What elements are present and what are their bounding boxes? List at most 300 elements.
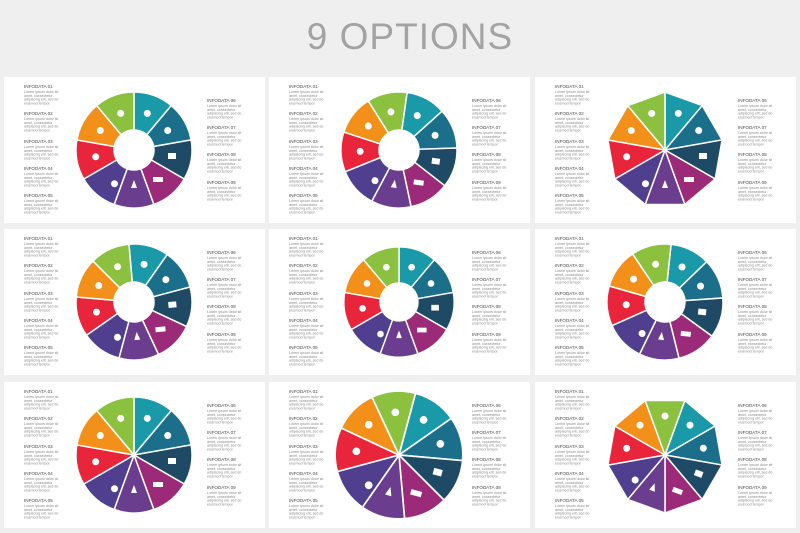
left text column: eiusmod tempor: [24, 488, 51, 492]
right text column: eiusmod tempor: [472, 267, 499, 271]
chart: arrow donut: [601, 238, 729, 366]
right text column: INFODATA 07: [207, 125, 236, 130]
right text column: amet, consectetur: [738, 342, 767, 346]
right text column: amet, consectetur: [472, 190, 501, 194]
left text column: INFODATA 03: [289, 291, 318, 296]
left text column: adipiscing elit, sed do: [289, 305, 323, 309]
left text column: adipiscing elit, sed do: [289, 485, 323, 489]
right text column: [738, 98, 772, 201]
right text column: Lorem ipsum dolor sit: [738, 436, 772, 440]
right text column: amet, consectetur: [472, 440, 501, 444]
right text column: amet, consectetur: [738, 287, 767, 291]
left text column: adipiscing elit, sed do: [289, 98, 323, 102]
right text column: adipiscing elit, sed do: [472, 166, 506, 170]
left text column: amet, consectetur: [555, 273, 584, 277]
left text column: amet, consectetur: [289, 94, 318, 98]
left text column: eiusmod tempor: [555, 183, 582, 187]
right text column: eiusmod tempor: [207, 349, 234, 353]
right text column: eiusmod tempor: [472, 115, 499, 119]
right text column: adipiscing elit, sed do: [738, 444, 772, 448]
left text column: adipiscing elit, sed do: [555, 125, 589, 129]
left text column: adipiscing elit, sed do: [289, 125, 323, 129]
right text column: Lorem ipsum dolor sit: [738, 463, 772, 467]
right text column: adipiscing elit, sed do: [207, 346, 241, 350]
left text column: Lorem ipsum dolor sit: [555, 145, 589, 149]
left text column: Lorem ipsum dolor sit: [289, 351, 323, 355]
right text column: amet, consectetur: [738, 495, 767, 499]
left text column: amet, consectetur: [24, 454, 53, 458]
panel: option 1 donut: [4, 77, 265, 223]
left text column: amet, consectetur: [289, 301, 318, 305]
left text column: adipiscing elit, sed do: [24, 250, 58, 254]
left text column: INFODATA 04: [289, 318, 318, 323]
left text column: adipiscing elit, sed do: [24, 430, 58, 434]
right text column: Lorem ipsum dolor sit: [207, 283, 241, 287]
right text column: adipiscing elit, sed do: [207, 112, 241, 116]
right text column: amet, consectetur: [472, 287, 501, 291]
left text column: INFODATA 02: [24, 416, 53, 421]
right text column: adipiscing elit, sed do: [472, 417, 506, 421]
left text column: INFODATA 03: [555, 139, 584, 144]
right text column: INFODATA 08: [472, 152, 501, 157]
left text column: INFODATA 02: [555, 111, 584, 116]
right text column: amet, consectetur: [207, 162, 236, 166]
left text column: Lorem ipsum dolor sit: [289, 395, 323, 399]
right text column: INFODATA 07: [472, 430, 501, 435]
chart: pentagon star: [593, 381, 739, 526]
panel: option 9 star: [535, 381, 796, 528]
right text column: Lorem ipsum dolor sit: [472, 158, 506, 162]
right text column: INFODATA 07: [738, 430, 767, 435]
left text column: INFODATA 01: [555, 389, 584, 394]
right text column: amet, consectetur: [472, 467, 501, 471]
left text column: amet, consectetur: [555, 426, 584, 430]
left text column: eiusmod tempor: [24, 335, 51, 339]
left text column: eiusmod tempor: [555, 488, 582, 492]
left text column: Lorem ipsum dolor sit: [24, 117, 58, 121]
right text column: INFODATA 06: [738, 403, 767, 408]
left text column: eiusmod tempor: [555, 433, 582, 437]
right text column: Lorem ipsum dolor sit: [207, 436, 241, 440]
right text column: amet, consectetur: [738, 190, 767, 194]
right text column: [472, 403, 506, 506]
chart: spiral: [321, 377, 477, 533]
left text column: eiusmod tempor: [24, 128, 51, 132]
left text column: Lorem ipsum dolor sit: [555, 90, 589, 94]
right text column: adipiscing elit, sed do: [207, 417, 241, 421]
right text column: adipiscing elit, sed do: [472, 291, 506, 295]
right text column: INFODATA 06: [207, 250, 236, 255]
left text column: adipiscing elit, sed do: [555, 98, 589, 102]
left text column: amet, consectetur: [24, 273, 53, 277]
left text column: Lorem ipsum dolor sit: [24, 242, 58, 246]
left text column: Lorem ipsum dolor sit: [555, 117, 589, 121]
right text column: Lorem ipsum dolor sit: [472, 463, 506, 467]
right text column: amet, consectetur: [472, 135, 501, 139]
right text column: INFODATA 08: [207, 304, 236, 309]
left text column: INFODATA 03: [555, 291, 584, 296]
left text column: Lorem ipsum dolor sit: [289, 90, 323, 94]
right text column: eiusmod tempor: [738, 142, 765, 146]
left text column: INFODATA 05: [555, 498, 584, 503]
left text column: eiusmod tempor: [24, 515, 51, 519]
left text column: INFODATA 05: [24, 193, 53, 198]
left text column: adipiscing elit, sed do: [24, 153, 58, 157]
right text column: eiusmod tempor: [472, 502, 499, 506]
left text column: amet, consectetur: [555, 481, 584, 485]
left text column: amet, consectetur: [555, 176, 584, 180]
left text column: eiusmod tempor: [289, 156, 316, 160]
left text column: Lorem ipsum dolor sit: [555, 504, 589, 508]
right text column: INFODATA 08: [207, 457, 236, 462]
right text column: eiusmod tempor: [207, 115, 234, 119]
right text column: INFODATA 09: [738, 180, 767, 185]
right text column: adipiscing elit, sed do: [207, 499, 241, 503]
left text column: amet, consectetur: [24, 121, 53, 125]
right text column: INFODATA 06: [207, 98, 236, 103]
right text column: Lorem ipsum dolor sit: [738, 104, 772, 108]
right text column: adipiscing elit, sed do: [738, 194, 772, 198]
right text column: adipiscing elit, sed do: [207, 264, 241, 268]
left text column: eiusmod tempor: [24, 101, 51, 105]
right text column: INFODATA 09: [738, 485, 767, 490]
chart: nonagon: [608, 92, 722, 204]
left text column: eiusmod tempor: [24, 210, 51, 214]
right text column: adipiscing elit, sed do: [738, 471, 772, 475]
left text column: eiusmod tempor: [555, 101, 582, 105]
right text column: Lorem ipsum dolor sit: [472, 310, 506, 314]
right text column: INFODATA 07: [738, 277, 767, 282]
left text column: Lorem ipsum dolor sit: [555, 477, 589, 481]
left text column: Lorem ipsum dolor sit: [555, 242, 589, 246]
right text column: [738, 250, 772, 353]
left text column: amet, consectetur: [555, 454, 584, 458]
left text column: eiusmod tempor: [24, 308, 51, 312]
right text column: Lorem ipsum dolor sit: [207, 158, 241, 162]
left text column: INFODATA 05: [289, 193, 318, 198]
left text column: eiusmod tempor: [555, 406, 582, 410]
left text column: Lorem ipsum dolor sit: [555, 172, 589, 176]
right text column: eiusmod tempor: [738, 447, 765, 451]
left text column: Lorem ipsum dolor sit: [289, 504, 323, 508]
left text column: eiusmod tempor: [24, 253, 51, 257]
left text column: INFODATA 03: [24, 291, 53, 296]
left text column: amet, consectetur: [289, 149, 318, 153]
left text column: Lorem ipsum dolor sit: [555, 450, 589, 454]
left text column: amet, consectetur: [555, 121, 584, 125]
right text column: adipiscing elit, sed do: [738, 499, 772, 503]
right text column: eiusmod tempor: [738, 502, 765, 506]
right text column: amet, consectetur: [207, 190, 236, 194]
right text column: INFODATA 08: [472, 304, 501, 309]
right text column: INFODATA 06: [207, 403, 236, 408]
right text column: adipiscing elit, sed do: [472, 264, 506, 268]
right text column: eiusmod tempor: [207, 502, 234, 506]
right text column: amet, consectetur: [472, 342, 501, 346]
right text column: eiusmod tempor: [472, 169, 499, 173]
right text column: [472, 98, 506, 201]
left text column: eiusmod tempor: [289, 488, 316, 492]
right text column: [472, 250, 506, 353]
right text column: adipiscing elit, sed do: [207, 291, 241, 295]
left text column: amet, consectetur: [24, 301, 53, 305]
left text column: eiusmod tempor: [24, 461, 51, 465]
right text column: eiusmod tempor: [207, 420, 234, 424]
left text column: adipiscing elit, sed do: [555, 277, 589, 281]
left text column: Lorem ipsum dolor sit: [289, 145, 323, 149]
left text column: adipiscing elit, sed do: [555, 485, 589, 489]
left text column: Lorem ipsum dolor sit: [555, 199, 589, 203]
left text column: INFODATA 05: [24, 498, 53, 503]
left text column: INFODATA 02: [289, 111, 318, 116]
right text column: adipiscing elit, sed do: [738, 346, 772, 350]
right text column: INFODATA 08: [738, 457, 767, 462]
left text column: amet, consectetur: [555, 301, 584, 305]
chart: stepped donut: [71, 239, 197, 365]
left text column: amet, consectetur: [24, 426, 53, 430]
chart: rounded donut: [344, 247, 454, 357]
right text column: Lorem ipsum dolor sit: [738, 491, 772, 495]
left text column: eiusmod tempor: [289, 280, 316, 284]
left text column: INFODATA 02: [555, 263, 584, 268]
right text column: adipiscing elit, sed do: [207, 166, 241, 170]
left text column: INFODATA 04: [24, 318, 53, 323]
right text column: eiusmod tempor: [738, 115, 765, 119]
left text column: eiusmod tempor: [289, 183, 316, 187]
right text column: Lorem ipsum dolor sit: [207, 310, 241, 314]
left text column: eiusmod tempor: [289, 362, 316, 366]
right text column: adipiscing elit, sed do: [207, 318, 241, 322]
left text column: Lorem ipsum dolor sit: [24, 324, 58, 328]
left text column: INFODATA 03: [555, 444, 584, 449]
left text column: Lorem ipsum dolor sit: [555, 269, 589, 273]
left text column: amet, consectetur: [24, 355, 53, 359]
left text column: INFODATA 02: [24, 263, 53, 268]
left text column: [289, 236, 323, 366]
left text column: Lorem ipsum dolor sit: [289, 172, 323, 176]
left text column: INFODATA 01: [555, 84, 584, 89]
right text column: Lorem ipsum dolor sit: [207, 463, 241, 467]
right text column: adipiscing elit, sed do: [472, 471, 506, 475]
title: 9 OPTIONS: [307, 16, 513, 57]
left text column: INFODATA 05: [555, 345, 584, 350]
right text column: INFODATA 09: [472, 485, 501, 490]
left text column: INFODATA 01: [289, 236, 318, 241]
right text column: adipiscing elit, sed do: [472, 139, 506, 143]
right text column: amet, consectetur: [207, 314, 236, 318]
left text column: adipiscing elit, sed do: [555, 512, 589, 516]
right text column: adipiscing elit, sed do: [738, 112, 772, 116]
left text column: Lorem ipsum dolor sit: [24, 172, 58, 176]
left text column: adipiscing elit, sed do: [555, 430, 589, 434]
left text column: adipiscing elit, sed do: [24, 359, 58, 363]
right text column: amet, consectetur: [738, 260, 767, 264]
right text column: amet, consectetur: [207, 135, 236, 139]
left text column: INFODATA 04: [24, 471, 53, 476]
right text column: Lorem ipsum dolor sit: [472, 256, 506, 260]
right text column: [207, 403, 241, 506]
left text column: eiusmod tempor: [555, 461, 582, 465]
left text column: [555, 236, 589, 366]
left text column: INFODATA 04: [289, 471, 318, 476]
right text column: INFODATA 07: [207, 430, 236, 435]
right text column: adipiscing elit, sed do: [472, 112, 506, 116]
right text column: Lorem ipsum dolor sit: [472, 186, 506, 190]
right text column: INFODATA 08: [738, 152, 767, 157]
left text column: INFODATA 04: [555, 471, 584, 476]
left text column: INFODATA 05: [24, 345, 53, 350]
right text column: Lorem ipsum dolor sit: [472, 283, 506, 287]
left text column: Lorem ipsum dolor sit: [289, 477, 323, 481]
right text column: amet, consectetur: [738, 135, 767, 139]
right text column: eiusmod tempor: [472, 447, 499, 451]
left text column: eiusmod tempor: [24, 406, 51, 410]
left text column: adipiscing elit, sed do: [24, 277, 58, 281]
left text column: eiusmod tempor: [289, 253, 316, 257]
right text column: Lorem ipsum dolor sit: [738, 186, 772, 190]
left text column: eiusmod tempor: [555, 515, 582, 519]
left text column: INFODATA 05: [289, 498, 318, 503]
left text column: adipiscing elit, sed do: [555, 458, 589, 462]
right text column: [738, 403, 772, 506]
left text column: [289, 389, 323, 519]
chart: exploded wheel: [333, 84, 465, 216]
right text column: amet, consectetur: [207, 467, 236, 471]
right text column: eiusmod tempor: [472, 142, 499, 146]
right text column: eiusmod tempor: [738, 294, 765, 298]
left text column: amet, consectetur: [24, 246, 53, 250]
left text column: [555, 84, 589, 214]
right text column: eiusmod tempor: [472, 321, 499, 325]
right text column: INFODATA 09: [207, 485, 236, 490]
left text column: amet, consectetur: [555, 508, 584, 512]
right text column: [207, 98, 241, 201]
left text column: adipiscing elit, sed do: [555, 153, 589, 157]
left text column: amet, consectetur: [24, 508, 53, 512]
right text column: adipiscing elit, sed do: [472, 346, 506, 350]
left text column: INFODATA 02: [289, 416, 318, 421]
right text column: eiusmod tempor: [472, 349, 499, 353]
right text column: Lorem ipsum dolor sit: [472, 338, 506, 342]
right text column: Lorem ipsum dolor sit: [738, 158, 772, 162]
right text column: adipiscing elit, sed do: [738, 417, 772, 421]
left text column: Lorem ipsum dolor sit: [24, 351, 58, 355]
right text column: INFODATA 09: [738, 332, 767, 337]
left text column: adipiscing elit, sed do: [24, 512, 58, 516]
left text column: eiusmod tempor: [555, 362, 582, 366]
right text column: Lorem ipsum dolor sit: [472, 436, 506, 440]
right text column: eiusmod tempor: [738, 474, 765, 478]
left text column: eiusmod tempor: [289, 515, 316, 519]
left text column: eiusmod tempor: [289, 128, 316, 132]
left text column: Lorem ipsum dolor sit: [289, 422, 323, 426]
right text column: eiusmod tempor: [207, 267, 234, 271]
right text column: Lorem ipsum dolor sit: [207, 491, 241, 495]
right text column: amet, consectetur: [207, 495, 236, 499]
right text column: adipiscing elit, sed do: [738, 166, 772, 170]
right text column: Lorem ipsum dolor sit: [738, 256, 772, 260]
right text column: eiusmod tempor: [738, 267, 765, 271]
left text column: amet, consectetur: [24, 328, 53, 332]
left text column: eiusmod tempor: [289, 101, 316, 105]
right text column: adipiscing elit, sed do: [207, 194, 241, 198]
left text column: amet, consectetur: [555, 149, 584, 153]
chart: donut wheel: [76, 92, 192, 208]
panel: option 4 spiral donut: [4, 229, 265, 375]
right text column: Lorem ipsum dolor sit: [738, 283, 772, 287]
left text column: Lorem ipsum dolor sit: [289, 242, 323, 246]
left text column: amet, consectetur: [24, 481, 53, 485]
left text column: adipiscing elit, sed do: [555, 250, 589, 254]
left text column: eiusmod tempor: [555, 308, 582, 312]
left text column: adipiscing elit, sed do: [289, 180, 323, 184]
left text column: adipiscing elit, sed do: [289, 250, 323, 254]
right text column: eiusmod tempor: [738, 321, 765, 325]
left text column: adipiscing elit, sed do: [289, 277, 323, 281]
left text column: Lorem ipsum dolor sit: [555, 297, 589, 301]
right text column: Lorem ipsum dolor sit: [472, 104, 506, 108]
right text column: adipiscing elit, sed do: [472, 444, 506, 448]
right text column: Lorem ipsum dolor sit: [472, 491, 506, 495]
left text column: amet, consectetur: [24, 176, 53, 180]
right text column: adipiscing elit, sed do: [207, 471, 241, 475]
right text column: adipiscing elit, sed do: [207, 444, 241, 448]
left text column: amet, consectetur: [24, 149, 53, 153]
left text column: INFODATA 01: [24, 236, 53, 241]
left text column: amet, consectetur: [555, 328, 584, 332]
right text column: INFODATA 06: [738, 98, 767, 103]
panel: option 8 spiral: [269, 377, 530, 533]
right text column: Lorem ipsum dolor sit: [207, 186, 241, 190]
right text column: amet, consectetur: [207, 413, 236, 417]
left text column: amet, consectetur: [289, 426, 318, 430]
panel: option 6 arrow donut: [535, 229, 796, 375]
left text column: eiusmod tempor: [289, 433, 316, 437]
right text column: Lorem ipsum dolor sit: [207, 104, 241, 108]
right text column: Lorem ipsum dolor sit: [207, 131, 241, 135]
left text column: amet, consectetur: [289, 508, 318, 512]
left text column: amet, consectetur: [555, 94, 584, 98]
left text column: INFODATA 03: [24, 139, 53, 144]
right text column: eiusmod tempor: [207, 474, 234, 478]
left text column: [24, 236, 58, 366]
right text column: Lorem ipsum dolor sit: [738, 131, 772, 135]
right text column: amet, consectetur: [207, 260, 236, 264]
left text column: INFODATA 02: [555, 416, 584, 421]
left text column: adipiscing elit, sed do: [289, 207, 323, 211]
left text column: INFODATA 05: [289, 345, 318, 350]
left text column: eiusmod tempor: [24, 433, 51, 437]
left text column: Lorem ipsum dolor sit: [289, 324, 323, 328]
left text column: INFODATA 02: [24, 111, 53, 116]
right text column: amet, consectetur: [738, 108, 767, 112]
panel: option 2 exploded wheel: [269, 77, 530, 223]
right text column: adipiscing elit, sed do: [207, 139, 241, 143]
left text column: eiusmod tempor: [555, 156, 582, 160]
left text column: amet, consectetur: [289, 481, 318, 485]
right text column: adipiscing elit, sed do: [472, 499, 506, 503]
left text column: Lorem ipsum dolor sit: [555, 422, 589, 426]
left text column: [24, 84, 58, 214]
right text column: eiusmod tempor: [207, 142, 234, 146]
left text column: INFODATA 04: [555, 318, 584, 323]
left text column: eiusmod tempor: [555, 335, 582, 339]
left text column: eiusmod tempor: [289, 406, 316, 410]
right text column: eiusmod tempor: [207, 169, 234, 173]
left text column: Lorem ipsum dolor sit: [24, 90, 58, 94]
left text column: eiusmod tempor: [24, 362, 51, 366]
right text column: INFODATA 08: [472, 457, 501, 462]
